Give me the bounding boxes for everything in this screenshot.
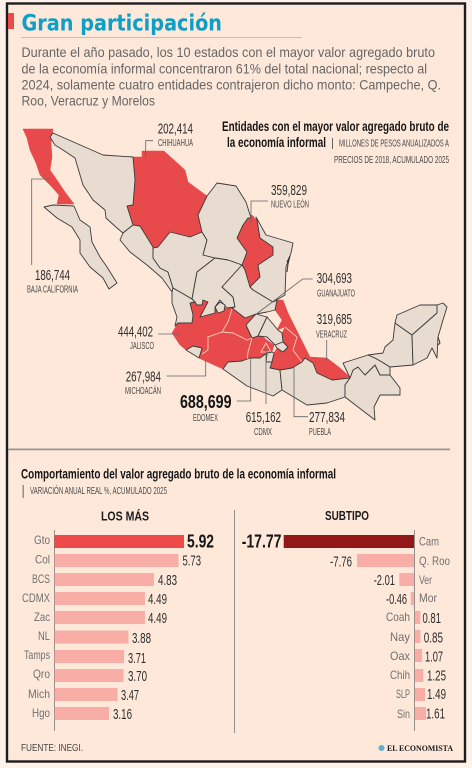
intro text: Durante el año pasado, los 10 estados con el mayor valor agregado bruto — [22, 44, 435, 60]
title: Gran participación — [22, 12, 222, 36]
chart heading: los más: LOS MÁS — [101, 509, 149, 524]
source note: FUENTE: INEGI. — [21, 743, 83, 754]
state labels: Mor — [419, 591, 437, 605]
chart heading: subtipo: SUBTIPO — [325, 508, 369, 523]
state labels: Q. Roo — [419, 554, 450, 568]
beige states — [44, 133, 447, 420]
bar chart: subtipo — [242, 508, 450, 731]
state labels: Tamps — [24, 648, 50, 662]
values: 1.07 — [425, 650, 443, 666]
state: Veracruz (highlighted) — [275, 300, 350, 380]
callout: Guanajuato: GUANAJUATO — [317, 288, 355, 300]
values: 3.16 — [113, 707, 132, 723]
callout: Jalisco: JALISCO — [130, 340, 154, 352]
callout: Nuevo León: NUEVO LEÓN — [271, 198, 309, 211]
values: 3.71 — [128, 651, 146, 667]
values: 5.92 — [187, 532, 214, 552]
intro text: 2024, solamente cuatro entidades contrajeron dicho monto: Campeche, Q. — [22, 76, 441, 92]
values: -7.76 — [330, 555, 352, 571]
callout: Baja California — [27, 179, 78, 296]
state labels: BCS — [32, 572, 50, 586]
heading: annual behaviour: Comportamiento del valor agregado bruto de la economía informal — [21, 465, 336, 481]
values: 4.49 — [148, 592, 167, 608]
state: Nuevo León (highlighted) — [237, 215, 273, 287]
state labels: NL — [38, 629, 50, 643]
values: 1.49 — [427, 687, 446, 703]
state: Jalisco, Michoacán, Guanajuato and Edomex (highlighted) — [172, 300, 274, 369]
callout: Puebla: PUEBLA — [309, 426, 331, 438]
state labels: Gto — [34, 533, 50, 547]
values: 3.70 — [128, 669, 147, 685]
bars — [54, 535, 184, 720]
values: -17.77 — [242, 532, 282, 552]
callout: Puebla — [294, 367, 345, 438]
callout: Guanajuato — [255, 271, 355, 315]
callout: Edomex — [180, 358, 251, 424]
state labels: Zac — [34, 610, 50, 624]
callout: Chihuahua: CHIHUAHUA — [158, 137, 193, 149]
callout: CDMX: 615,162 — [246, 410, 281, 426]
state labels: Nay — [390, 630, 410, 644]
state: Baja California (highlighted) — [23, 129, 74, 204]
state: CDMX (highlighted) — [261, 343, 271, 352]
state labels: Col — [35, 552, 50, 566]
state labels — [22, 533, 50, 720]
subheading: annual variation: VARIACIÓN ANUAL REAL %, ACUMULADO 2025 — [30, 484, 167, 497]
callout: Veracruz: VERACRUZ — [316, 329, 347, 341]
callout: Baja California: 186,744 — [35, 268, 70, 284]
title underline — [21, 36, 302, 39]
state labels: Chih — [390, 668, 410, 682]
values: -0.46 — [386, 592, 407, 608]
callout: Guanajuato: 304,693 — [317, 271, 352, 287]
callout: Jalisco — [118, 325, 180, 352]
values: 4.83 — [158, 573, 177, 589]
coast detail — [287, 256, 440, 345]
callout: Edomex: EDOMEX — [193, 412, 218, 424]
values: 0.85 — [424, 631, 443, 647]
callout: Michoacán: 267,984 — [126, 370, 161, 386]
values — [242, 532, 446, 723]
state labels: Ver — [419, 573, 432, 587]
state: Puebla (highlighted) — [270, 327, 302, 370]
state labels: Cam — [419, 535, 439, 549]
callout: Michoacán — [125, 360, 206, 397]
logo: El Economista: EL ECONOMISTA — [387, 743, 454, 753]
state labels: Sin — [397, 707, 410, 721]
map of Mexico — [23, 129, 447, 420]
icon: red title tab — [8, 13, 14, 29]
state labels: Mich — [28, 687, 50, 701]
intro text — [22, 44, 441, 108]
callout: CDMX — [246, 348, 281, 438]
callout: Nuevo León: 359,829 — [271, 183, 307, 199]
values — [113, 532, 214, 723]
intro text: de la economía informal concentraron 61% del total nacional; respecto al — [22, 60, 427, 76]
callout: Veracruz: 319,685 — [317, 312, 352, 328]
callout: Veracruz — [316, 312, 352, 361]
bar chart: los más — [22, 509, 214, 731]
callout: Chihuahua: 202,414 — [158, 122, 193, 138]
callout: Jalisco: 444,402 — [118, 325, 153, 341]
state: Chihuahua (highlighted) — [127, 151, 207, 247]
callout: Puebla: 277,834 — [309, 410, 345, 426]
state labels: Hgo — [32, 706, 50, 720]
values: 3.47 — [121, 688, 139, 704]
state labels: CDMX — [22, 591, 50, 605]
callout: Nuevo León — [251, 183, 309, 223]
callout: Baja California: BAJA CALIFORNIA — [27, 284, 78, 296]
state labels: Coah — [386, 610, 410, 624]
state labels: Qro — [33, 667, 50, 681]
state labels: Oax — [390, 649, 410, 663]
map legend title — [222, 119, 449, 166]
values: 3.88 — [132, 631, 151, 647]
callout: Edomex: 688,699 — [180, 392, 232, 412]
callout: Chihuahua — [146, 122, 193, 158]
callout: Michoacán: MICHOACÁN — [125, 384, 161, 397]
bars — [284, 535, 426, 720]
values: 1.25 — [427, 669, 446, 685]
callout: CDMX: CDMX — [254, 426, 272, 438]
map legend title: la economía informal — [227, 135, 326, 150]
state labels — [386, 535, 450, 721]
values: 1.61 — [426, 707, 445, 723]
interior state lines — [202, 309, 302, 362]
intro text: Roo, Veracruz y Morelos — [22, 92, 155, 108]
values: 4.49 — [148, 611, 167, 627]
state labels: SLP — [396, 687, 410, 701]
values: -2.01 — [374, 573, 395, 589]
values: 5.73 — [182, 554, 201, 570]
values: 0.81 — [422, 611, 441, 627]
